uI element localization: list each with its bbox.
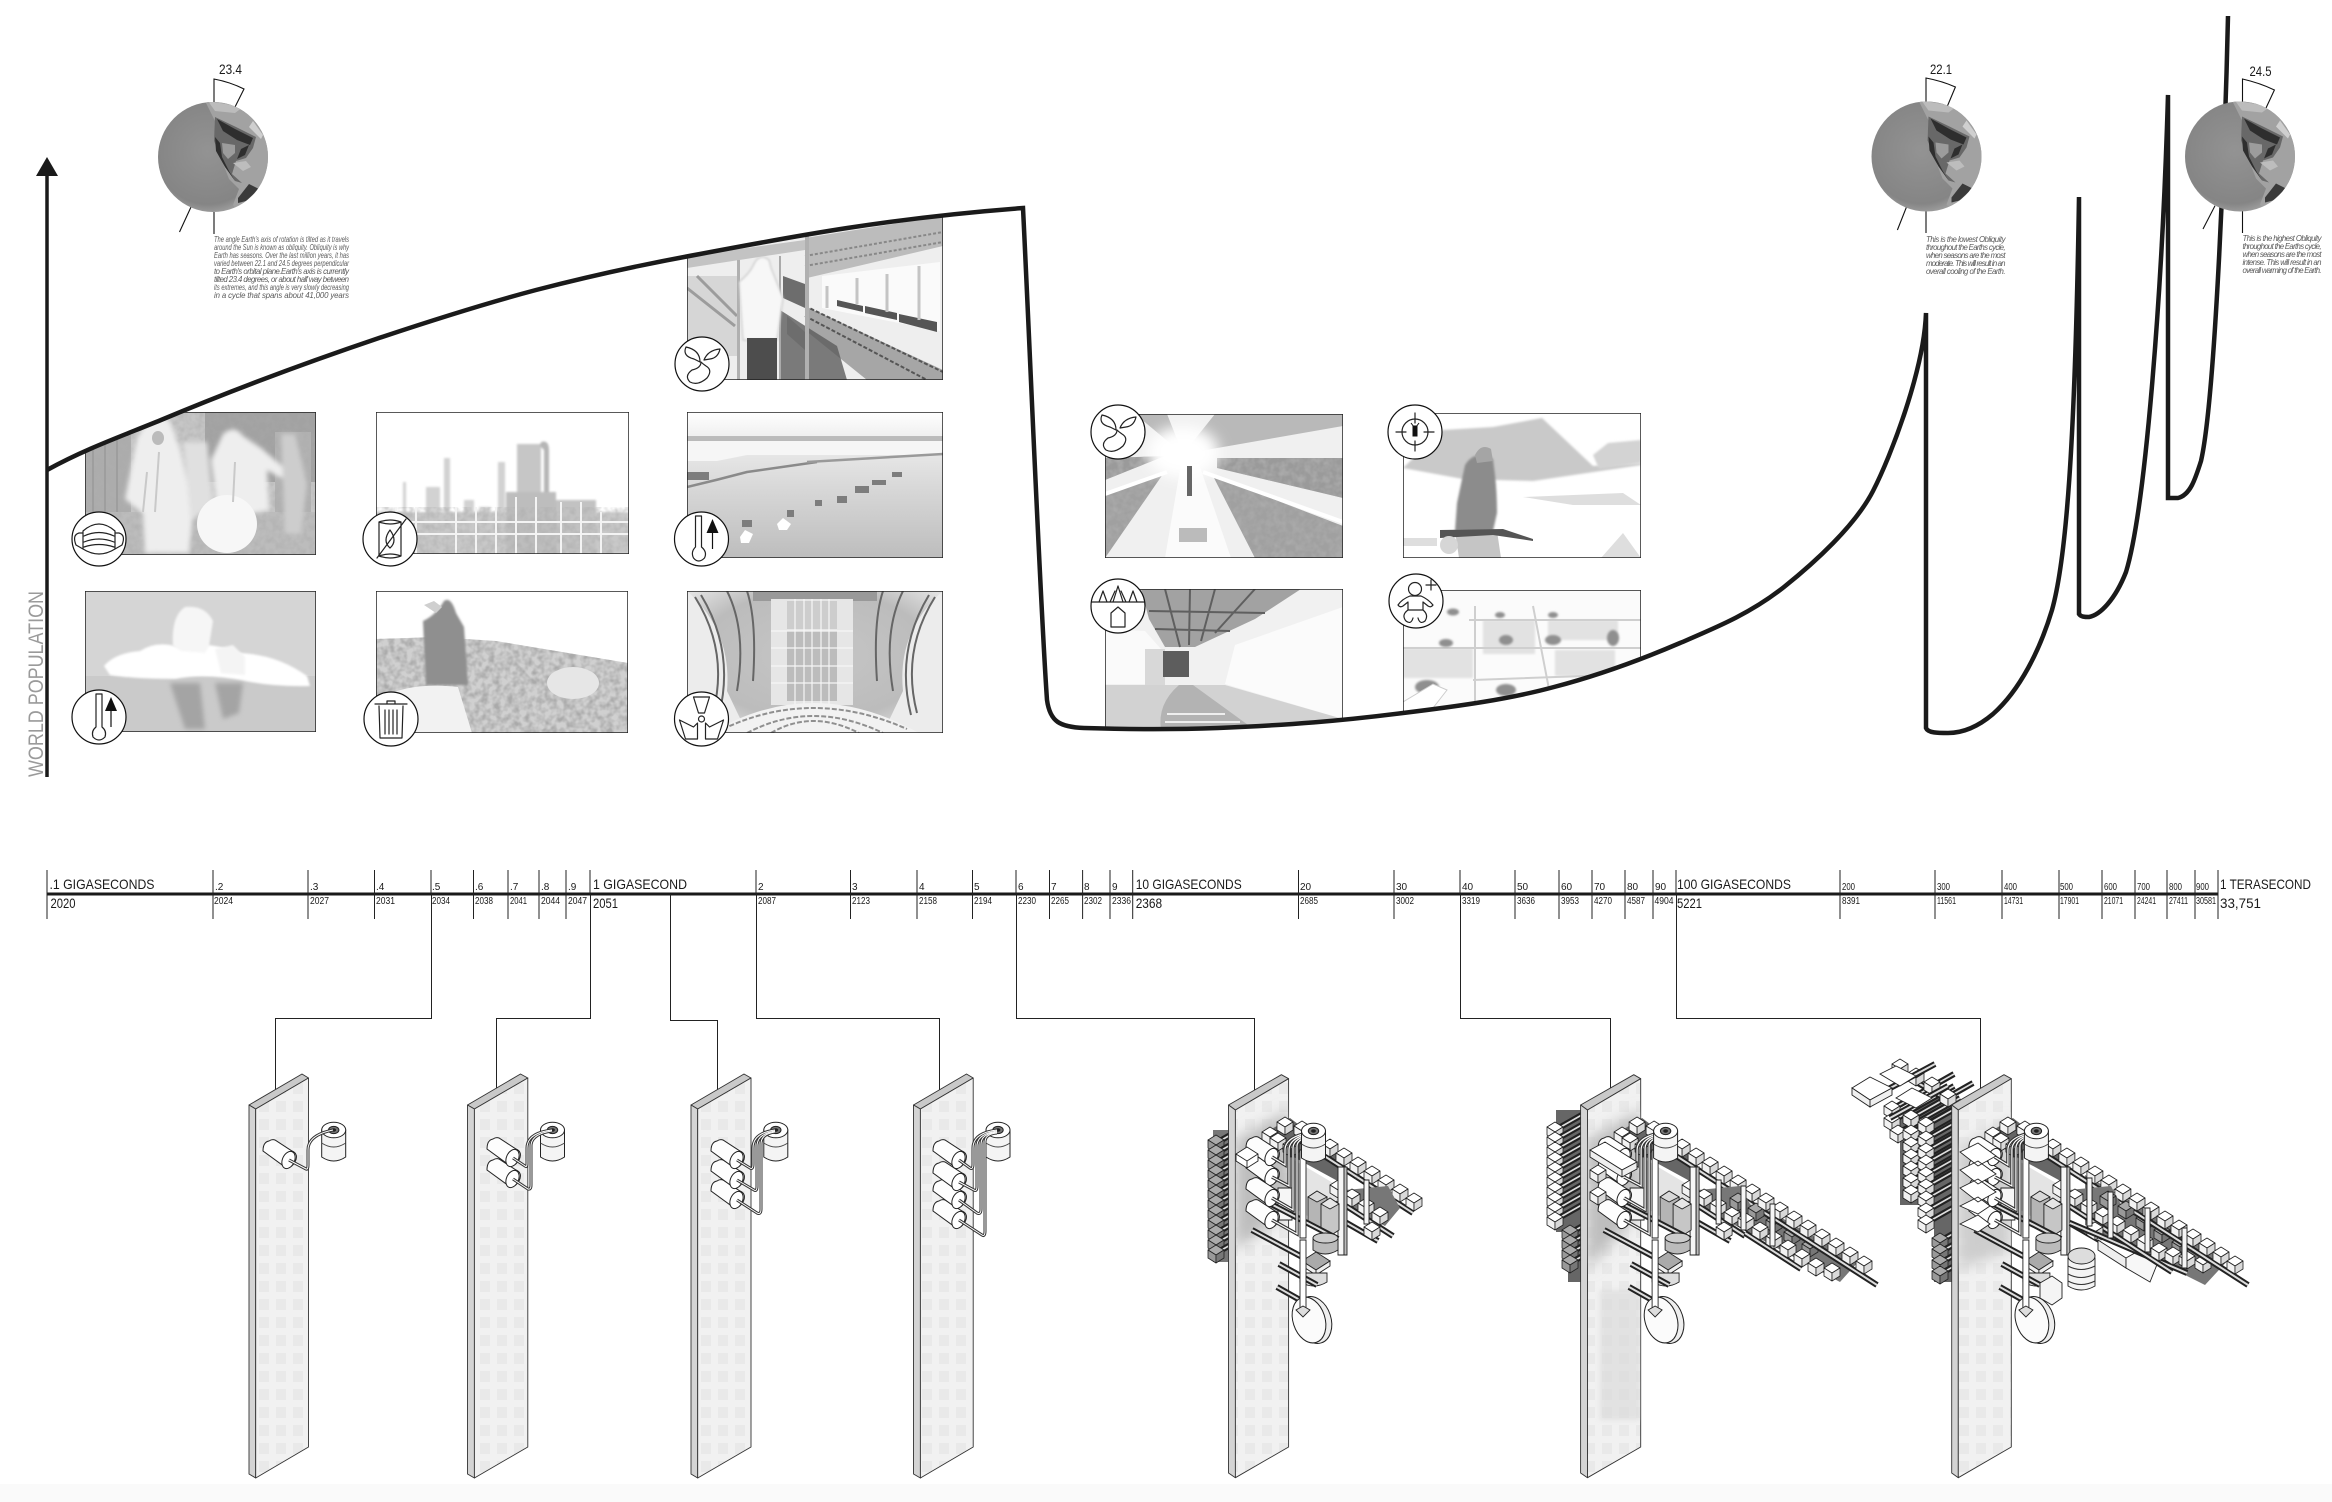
earth obliquity 23.4: 23.4	[219, 62, 242, 77]
y axis arrow	[36, 157, 58, 777]
photo: underground greenhouse	[1105, 414, 1343, 558]
timeline: gigaseconds and years: 2123	[852, 896, 870, 907]
timeline: gigaseconds and years: 100 GIGASECONDS	[1677, 876, 1791, 892]
timeline: gigaseconds and years: 5	[974, 882, 980, 893]
caption: highest obliquity: intense. This will result in an	[2242, 258, 2322, 267]
timeline: gigaseconds and years: 2038	[475, 896, 493, 907]
icon: sprout	[1091, 405, 1145, 459]
timeline: gigaseconds and years: 33,751	[2220, 895, 2261, 911]
timeline: gigaseconds and years: 1 GIGASECOND	[593, 876, 687, 892]
icon: trees above underground house	[1091, 579, 1145, 633]
timeline: gigaseconds and years: 8391	[1842, 896, 1860, 907]
timeline: gigaseconds and years: 3	[852, 882, 858, 893]
timeline: gigaseconds and years: 8	[1084, 882, 1090, 893]
panel: stage 7 full machine	[1852, 1059, 2248, 1478]
caption: highest obliquity: throughout the Earths cycle,	[2242, 242, 2322, 251]
timeline: gigaseconds and years: 1 TERASECOND	[2220, 876, 2311, 892]
timeline: gigaseconds and years: 90	[1655, 882, 1667, 893]
timeline: gigaseconds and years: 2047	[568, 896, 587, 907]
timeline: gigaseconds and years: 2	[758, 882, 764, 893]
timeline: gigaseconds and years: 300	[1937, 882, 1950, 893]
timeline: gigaseconds and years: .7	[510, 882, 519, 893]
timeline: gigaseconds and years: 400	[2004, 882, 2017, 893]
timeline: gigaseconds and years: 2051	[593, 895, 618, 911]
icon: baby plus	[1389, 574, 1443, 628]
photo: arctic hunter	[1403, 413, 1641, 558]
icon: sprout	[675, 337, 729, 391]
caption: obliquity explanation	[214, 235, 350, 300]
earth obliquity 24.5	[2185, 64, 2300, 233]
timeline: gigaseconds and years: 2020	[50, 895, 76, 911]
caption: lowest obliquity: when seasons are the most	[1926, 251, 2006, 260]
panel: stage 4 four cylinders	[914, 1074, 1010, 1478]
timeline: gigaseconds and years: 600	[2104, 882, 2117, 893]
axis label: world population: WORLD POPULATION	[25, 591, 48, 777]
timeline: gigaseconds and years: 4587	[1627, 896, 1645, 907]
icon: waste bin	[364, 692, 418, 746]
timeline: gigaseconds and years: .6	[475, 882, 484, 893]
photo: waste picker on landfill	[376, 591, 628, 733]
caption: obliquity explanation: its extremes, and this angle is very slowly decreasing	[214, 283, 349, 292]
timeline: gigaseconds and years: 30	[1396, 882, 1408, 893]
timeline: gigaseconds and years: .4	[376, 882, 385, 893]
icon: no oil can	[363, 512, 417, 566]
timeline: gigaseconds and years: .5	[432, 882, 441, 893]
timeline: gigaseconds and years: 30581	[2196, 896, 2216, 907]
timeline: gigaseconds and years: 11561	[1937, 896, 1956, 907]
timeline: gigaseconds and years: 2087	[758, 896, 776, 907]
caption: obliquity explanation: Earth has seasons. Over the last million years, it has	[214, 251, 349, 260]
timeline: gigaseconds and years: 3002	[1396, 896, 1414, 907]
timeline: gigaseconds and years: .8	[541, 882, 550, 893]
timeline: gigaseconds and years: 2336	[1112, 896, 1131, 907]
caption: lowest obliquity: moderate. This will result in an	[1926, 259, 2006, 268]
timeline: gigaseconds and years: 4904	[1654, 896, 1674, 907]
earth obliquity 23.4	[158, 62, 273, 234]
timeline: gigaseconds and years: 17901	[2060, 896, 2079, 907]
icon: radiation symbol	[674, 692, 728, 746]
timeline: gigaseconds and years: 21071	[2104, 896, 2123, 907]
photo: hazmat workers	[85, 412, 316, 555]
caption: highest obliquity: when seasons are the most	[2242, 250, 2322, 259]
photo: seed vault shelves	[687, 216, 943, 380]
timeline: gigaseconds and years: 2230	[1018, 896, 1036, 907]
timeline: gigaseconds and years: 800	[2169, 882, 2182, 893]
caption: obliquity explanation: varied between 22.1 and 24.5 degrees perpendicular	[214, 259, 349, 268]
timeline: gigaseconds and years: 2024	[214, 896, 233, 907]
timeline: gigaseconds and years: 2368	[1136, 895, 1162, 911]
timeline: gigaseconds and years	[47, 870, 2311, 919]
timeline: gigaseconds and years: 2027	[310, 896, 329, 907]
timeline: gigaseconds and years: 14731	[2004, 896, 2023, 907]
timeline: gigaseconds and years: 3319	[1462, 896, 1480, 907]
panel: stage 6 machine	[1547, 1075, 1877, 1478]
caption: obliquity explanation: to Earth's orbital plane.Earth's axis is currently	[214, 267, 350, 276]
connector lines from timeline to panels	[276, 894, 1980, 1095]
timeline: gigaseconds and years: 70	[1594, 882, 1606, 893]
timeline: gigaseconds and years: 10 GIGASECONDS	[1136, 876, 1242, 892]
timeline: gigaseconds and years: .9	[568, 882, 577, 893]
timeline: gigaseconds and years: 4	[919, 882, 925, 893]
timeline: gigaseconds and years: 27411	[2169, 896, 2188, 907]
caption: lowest obliquity: This is the lowest Obliquity	[1926, 235, 2007, 244]
timeline: gigaseconds and years: 3636	[1517, 896, 1535, 907]
timeline: gigaseconds and years: 900	[2196, 882, 2209, 893]
icon: face mask	[72, 512, 126, 566]
timeline: gigaseconds and years: 6	[1018, 882, 1024, 893]
caption: highest obliquity	[2242, 234, 2323, 275]
photo: flooded landscape	[687, 412, 943, 558]
icon: thermometer rising	[72, 690, 126, 744]
earth obliquity 22.1	[1872, 62, 1986, 233]
panel: stage 2 two cylinders	[468, 1074, 564, 1478]
timeline: gigaseconds and years: 40	[1462, 882, 1474, 893]
icon: thermometer rising	[674, 512, 728, 566]
caption: obliquity explanation: tilted 23.4 degrees, or about half way between	[214, 275, 349, 284]
timeline: gigaseconds and years: 2302	[1084, 896, 1102, 907]
white mask below lower curve	[1060, 643, 1680, 780]
photo: underground bunker tunnel	[1105, 589, 1343, 730]
timeline: gigaseconds and years: 200	[1842, 882, 1855, 893]
timeline: gigaseconds and years: .2	[215, 882, 224, 893]
caption: obliquity explanation: in a cycle that spans about 41,000 years	[214, 291, 349, 300]
timeline: gigaseconds and years: 60	[1561, 882, 1573, 893]
timeline: gigaseconds and years: 2034	[432, 896, 450, 907]
timeline: gigaseconds and years: 5221	[1677, 895, 1702, 911]
photo: oil refinery	[376, 412, 629, 554]
photo: polar bears on ice	[85, 591, 316, 732]
caption: lowest obliquity: overall cooling of the Earth.	[1926, 267, 2006, 276]
panel: stage 3 three cylinders	[691, 1074, 788, 1478]
timeline: gigaseconds and years: 500	[2060, 882, 2073, 893]
earth obliquity 24.5: 24.5	[2250, 64, 2272, 79]
caption: lowest obliquity: throughout the Earths cycle,	[1926, 243, 2006, 252]
panel: stage 1 one cylinder	[249, 1074, 346, 1478]
timeline: gigaseconds and years: 7	[1051, 882, 1057, 893]
white mask above main curve	[47, 0, 1023, 470]
photo: tokamak reactor interior	[687, 591, 943, 733]
upper left box cluster	[1852, 1059, 1988, 1284]
timeline: gigaseconds and years: 2685	[1300, 896, 1318, 907]
timeline: gigaseconds and years: 700	[2137, 882, 2150, 893]
panel: stage 5 machine	[1208, 1075, 1422, 1478]
timeline: gigaseconds and years: 50	[1517, 882, 1529, 893]
timeline: gigaseconds and years: 2158	[919, 896, 937, 907]
icon: hunting target	[1388, 405, 1442, 459]
timeline: gigaseconds and years: 3953	[1561, 896, 1579, 907]
timeline: gigaseconds and years: 24241	[2137, 896, 2156, 907]
caption: lowest obliquity	[1926, 235, 2007, 276]
timeline: gigaseconds and years: 4270	[1594, 896, 1612, 907]
photo: newborn nursery	[1403, 590, 1641, 720]
timeline: gigaseconds and years: 2031	[376, 896, 395, 907]
timeline: gigaseconds and years: 20	[1300, 882, 1312, 893]
timeline: gigaseconds and years: 80	[1627, 882, 1639, 893]
caption: obliquity explanation: around the Sun is known as obliquity. Obliquity is why	[214, 243, 350, 252]
timeline: gigaseconds and years: 2194	[974, 896, 992, 907]
timeline: gigaseconds and years: 2265	[1051, 896, 1069, 907]
timeline: gigaseconds and years: 9	[1112, 882, 1118, 893]
caption: obliquity explanation: The angle Earth's axis of rotation is tilted as it travels	[214, 235, 349, 244]
timeline: gigaseconds and years: 2044	[541, 896, 560, 907]
earth obliquity 22.1: 22.1	[1930, 62, 1952, 77]
caption: highest obliquity: overall warming of the Earth.	[2242, 266, 2322, 275]
timeline: gigaseconds and years: .1 GIGASECONDS	[50, 876, 154, 892]
caption: highest obliquity: This is the highest Obliquity	[2242, 234, 2323, 243]
main population curve	[47, 16, 2228, 733]
timeline: gigaseconds and years: 2041	[510, 896, 527, 907]
timeline: gigaseconds and years: .3	[310, 882, 319, 893]
